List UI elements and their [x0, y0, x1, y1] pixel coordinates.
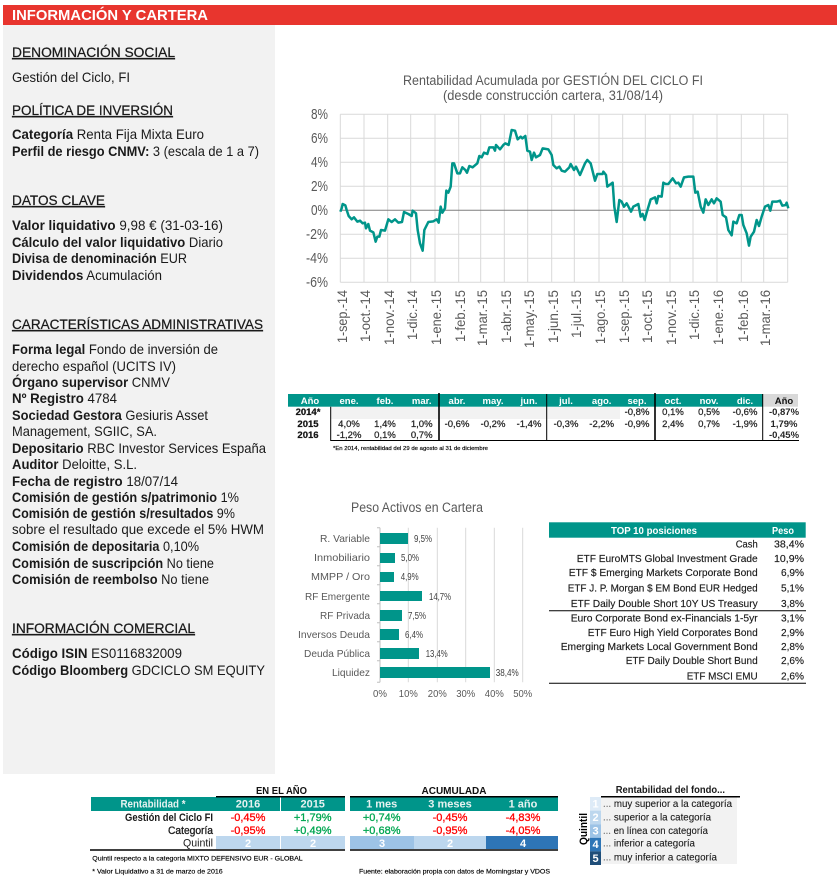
row 2015: 1,0%	[411, 419, 433, 430]
text: commercial information: Código Bloomberg GDCICLO SM EQUITY	[12, 662, 266, 678]
line chart: rentabilidad acumulada	[306, 73, 788, 348]
table header: sep.	[627, 396, 647, 407]
teal header row: 2016	[236, 798, 260, 810]
text: administrative characteristics: sobre el resultado que excede el 5% HWM	[12, 521, 264, 537]
text: key data: Valor liquidativo 9,98 € (31-03-16)	[12, 217, 223, 233]
table header: abr.	[449, 396, 465, 407]
top 10 rows: 6,9%	[781, 567, 804, 579]
text: investment policy	[12, 126, 259, 159]
section headings	[256, 784, 486, 797]
zero axis	[340, 209, 788, 211]
header bar	[3, 5, 837, 25]
top 10 rows: 5,1%	[781, 583, 804, 595]
x axis labels	[334, 290, 773, 348]
heading: datos clave: DATOS CLAVE	[12, 192, 105, 208]
row quintil	[183, 836, 558, 850]
teal header row: 2015	[300, 798, 325, 810]
x axis labels: 1-jun.-15	[545, 290, 561, 343]
chart title: Rentabilidad Acumulada por GESTIÓN DEL CICLO FI	[403, 73, 703, 88]
row 2015	[297, 419, 798, 430]
table header: Año	[775, 396, 793, 407]
table header: nov.	[700, 396, 718, 407]
row quintil: 2	[447, 838, 453, 850]
top 10 rows: ETF Daily Double Short Bund	[626, 655, 758, 667]
teal header row: 1 mes	[366, 798, 397, 810]
text: administrative characteristics: Sociedad Gestora Gesiuris Asset	[12, 407, 208, 423]
category labels: R. Variable	[320, 533, 370, 545]
row gestión del ciclo: +0,74%	[363, 812, 401, 824]
row 2015: 2015	[297, 419, 319, 430]
row 2014: 0,5%	[698, 407, 720, 418]
x axis labels: 1-dic.-15	[686, 290, 702, 340]
text: commercial information	[12, 645, 266, 678]
legend swatches: 4	[592, 839, 599, 851]
chart title: (desde construcción cartera, 31/08/14)	[443, 88, 663, 103]
row quintil: 4	[520, 838, 527, 850]
row 2016: 2016	[297, 430, 319, 441]
heading: características administrativas: CARACTERÍSTICAS ADMINISTRATIVAS	[12, 316, 263, 332]
x axis labels: 1-sep.-15	[616, 290, 632, 343]
heading: denominación social: DENOMINACIÓN SOCIAL	[12, 44, 175, 60]
value labels: 14,7%	[429, 592, 451, 603]
row 2016: -1,2%	[337, 430, 362, 441]
top 10 header: Peso	[772, 525, 794, 537]
legend items: ... muy superior a la categoría	[603, 799, 732, 810]
top 10 rows: ETF MSCI EMU	[687, 671, 758, 683]
top 10 header	[549, 522, 806, 538]
row categoría: -4,05%	[506, 825, 541, 837]
text: administrative characteristics: Management, SGIIC, SA.	[12, 423, 157, 439]
footnotes: Quintil respecto a la categoria MIXTO DEFENSIVO EUR - GLOBAL	[92, 855, 303, 862]
table header: dic.	[737, 396, 753, 407]
text: investment policy: Categoría Renta Fija Mixta Euro	[12, 126, 204, 142]
row 2016	[297, 430, 800, 441]
text: fund name: Gestión del Ciclo, FI	[12, 69, 130, 85]
table header: jun.	[520, 396, 537, 407]
x axis labels: 1-oct.-14	[357, 290, 373, 342]
x axis labels: 1-sep.-14	[334, 290, 350, 343]
x axis labels: 1-may.-15	[521, 290, 537, 348]
row categoría: -0,95%	[231, 825, 266, 837]
row gestión del ciclo: +1,79%	[294, 812, 332, 824]
footnotes: * Valor Liquidativo a 31 de marzo de 2016	[92, 869, 223, 876]
x axis labels: 1-ene.-16	[710, 290, 726, 345]
text: investment policy: Perfil de riesgo CNMV: 3 (escala de 1 a 7)	[12, 143, 259, 159]
teal header row: 1 año	[509, 798, 538, 810]
value labels: 13,4%	[426, 649, 448, 660]
row 2015: 2,4%	[662, 419, 684, 430]
y axis labels: 0%	[311, 202, 328, 219]
row categoría: +0,68%	[363, 825, 401, 837]
section headings: EN EL AÑO	[256, 784, 307, 797]
top 10 rows: 2,6%	[781, 655, 804, 667]
text: administrative characteristics	[12, 341, 266, 587]
y axis labels: 6%	[311, 130, 328, 147]
legend swatches: 1	[592, 798, 599, 810]
text: administrative characteristics: Fecha de registro 18/07/14	[12, 473, 178, 489]
panel: left information column	[3, 25, 275, 774]
text: key data: Cálculo del valor liquidativo Diario	[12, 234, 223, 250]
legend items	[603, 799, 732, 864]
x axis labels: 1-mar.-15	[474, 290, 490, 346]
row 2014	[296, 407, 800, 418]
category labels: MMPP / Oro	[311, 571, 370, 583]
row categoría: -0,95%	[433, 825, 468, 837]
row categoría: Categoría	[168, 825, 214, 837]
top 10 rows: 2,8%	[781, 641, 804, 653]
row 2015: -2,2%	[589, 419, 615, 430]
text: commercial information: Código ISIN ES0116832009	[12, 645, 182, 661]
table header: feb.	[377, 396, 393, 407]
row 2014: -0,87%	[769, 407, 800, 418]
top 10 rows: ETF $ Emerging Markets Corporate Bond	[569, 567, 758, 579]
top 10 rows: Cash	[736, 539, 758, 551]
legend items: ... inferior a categoría	[603, 839, 695, 850]
text: key data	[12, 217, 223, 283]
row quintil: 2	[245, 838, 251, 850]
top 10 rows: 10,9%	[774, 553, 804, 565]
table header: jul.	[558, 396, 573, 407]
text: key data: Divisa de denominación EUR	[12, 250, 187, 266]
x axis labels: 1-mar.-16	[757, 290, 773, 346]
value labels: 7,5%	[408, 611, 426, 622]
row gestión del ciclo	[125, 812, 541, 824]
row gestión del ciclo: Gestión del Ciclo FI	[125, 812, 213, 824]
x axis labels: 1-dic.-14	[404, 290, 420, 340]
value labels: 5,0%	[401, 553, 419, 564]
y axis labels: 4%	[311, 154, 328, 171]
table header: Año	[301, 396, 319, 407]
x axis labels: 1-nov.-14	[381, 290, 397, 345]
top 10 rows: ETF Daily Double Short 10Y US Treasury	[571, 598, 758, 610]
x axis percentages	[373, 688, 532, 700]
footnotes: Fuente: elaboración propia con datos de Morningstar y VDOS	[359, 869, 551, 876]
x axis labels: 1-feb.-15	[452, 290, 468, 342]
text: administrative characteristics: Comisión de suscripción No tiene	[12, 555, 214, 571]
heading: política de inversión: POLÍTICA DE INVERSIÓN	[12, 102, 173, 118]
y axis labels	[306, 106, 328, 291]
heading: información comercial: INFORMACIÓN COMERCIAL	[12, 620, 195, 636]
x axis percentages: 20%	[428, 688, 447, 700]
y axis labels: -4%	[306, 250, 328, 267]
y axis labels: -2%	[306, 226, 328, 243]
top 10 rows: 3,1%	[781, 613, 804, 625]
row gestión del ciclo: -4,83%	[506, 812, 541, 824]
top 10 rows: ETF Euro High Yield Corporates Bond	[588, 627, 758, 639]
y axis labels: 2%	[311, 178, 328, 195]
row 2015: -1,9%	[733, 419, 758, 430]
teal header row	[91, 797, 558, 811]
left column text	[12, 44, 266, 678]
table header: ago.	[592, 396, 611, 407]
row 2015: 1,4%	[374, 419, 396, 430]
top 10 rows: ETF EuroMTS Global Investment Grade	[577, 553, 758, 565]
category labels: Liquidez	[332, 667, 370, 679]
text: administrative characteristics: Forma legal Fondo de inversión de	[12, 341, 218, 357]
quintile legend	[578, 785, 740, 865]
category labels: Deuda Pública	[304, 648, 370, 660]
x axis percentages: 40%	[485, 688, 504, 700]
text: administrative characteristics: Comisión de gestión s/patrimonio 1%	[12, 489, 239, 505]
x axis labels: 1-nov.-15	[663, 290, 679, 345]
category labels	[298, 533, 370, 679]
value labels: 6,4%	[405, 630, 423, 641]
bar chart title: Peso Activos en Cartera	[351, 500, 483, 515]
row quintil: Quintil	[183, 838, 213, 850]
row 2016: 0,1%	[374, 430, 396, 441]
text: administrative characteristics: Comisión de depositaria 0,10%	[12, 538, 199, 554]
row gestión del ciclo: -0,45%	[231, 812, 266, 824]
row gestión del ciclo: -0,45%	[433, 812, 468, 824]
legend swatches: 2	[592, 812, 599, 824]
teal header row: 3 meses	[428, 798, 472, 810]
legend items: ... superior a la categoría	[603, 813, 711, 824]
table footnote: *En 2014, rentabilidad del 29 de agosto al 31 de diciembre	[333, 446, 488, 452]
header bar: INFORMACIÓN Y CARTERA	[12, 6, 208, 24]
row 2015: -0,2%	[481, 419, 506, 430]
row categoría: +0,49%	[294, 825, 332, 837]
table header: may.	[483, 396, 503, 407]
x axis labels: 1-jul.-15	[568, 290, 584, 338]
bars	[380, 533, 490, 678]
x axis labels: 1-ago.-15	[592, 290, 608, 344]
text: administrative characteristics: Nº Registro 4784	[12, 390, 117, 406]
summary returns table	[90, 784, 558, 850]
table header: oct.	[665, 396, 681, 407]
row quintil: 3	[379, 838, 385, 850]
text: key data: Dividendos Acumulación	[12, 267, 162, 283]
text: administrative characteristics: derecho español (UCITS IV)	[12, 358, 176, 374]
category labels: RF Privada	[320, 610, 370, 622]
value labels	[401, 534, 519, 679]
row 2014: -0,6%	[733, 407, 758, 418]
x axis labels: 1-feb.-16	[735, 290, 751, 342]
value labels: 38,4%	[496, 668, 519, 679]
top 10 rows: 2,6%	[781, 671, 804, 683]
legend title: Rentabilidad del fondo...	[616, 785, 725, 796]
top 10 rows: 38,4%	[774, 539, 804, 551]
y axis labels: 8%	[311, 106, 328, 123]
top 10 rows: 2,9%	[781, 627, 804, 639]
data line	[340, 130, 788, 251]
top 10 rows: Euro Corporate Bond ex-Financials 1-5yr	[571, 613, 758, 625]
legend items: ... muy inferior a categoría	[603, 853, 717, 864]
legend rotated label: Quintil	[578, 813, 590, 845]
row 2014: -0,8%	[625, 407, 650, 418]
x axis percentages: 30%	[456, 688, 475, 700]
row 2015: 0,7%	[698, 419, 720, 430]
table header	[301, 396, 793, 407]
legend swatches: 5	[592, 853, 599, 865]
text: administrative characteristics: Órgano supervisor CNMV	[12, 373, 171, 390]
category labels: RF Emergente	[305, 591, 370, 603]
x axis percentages: 10%	[399, 688, 418, 700]
text: administrative characteristics: Depositario RBC Investor Services España	[12, 440, 266, 456]
top 10 rows: 3,8%	[781, 598, 804, 610]
table header: ene.	[339, 396, 359, 407]
row 2015: 4,0%	[338, 419, 360, 430]
top 10 rows: Emerging Markets Local Government Bond	[561, 641, 758, 653]
row 2016: -0,45%	[769, 430, 800, 441]
x axis labels: 1-ene.-15	[428, 290, 444, 345]
x axis percentages: 0%	[373, 688, 387, 700]
text: administrative characteristics: Comisión de reembolso No tiene	[12, 571, 209, 587]
table header: mar.	[412, 396, 431, 407]
value labels: 9,5%	[414, 534, 432, 545]
legend swatches: 3	[592, 826, 599, 838]
section headings: ACUMULADA	[422, 786, 486, 797]
row 2014: 2014*	[296, 407, 321, 418]
y axis labels: -6%	[306, 274, 328, 291]
legend swatches	[590, 797, 601, 865]
row 2014: 0,1%	[662, 407, 684, 418]
row 2016: 0,7%	[411, 430, 433, 441]
chart title	[403, 73, 703, 103]
value labels: 4,9%	[401, 572, 419, 583]
footnotes	[92, 855, 551, 876]
top 10 rows: ETF J. P. Morgan $ EM Bond EUR Hedged	[568, 583, 758, 595]
bar chart: peso activos en cartera	[298, 500, 532, 700]
x axis labels: 1-oct.-15	[639, 290, 655, 343]
teal header row: Rentabilidad *	[120, 798, 186, 810]
x axis labels: 1-abr.-15	[498, 290, 514, 343]
text: administrative characteristics: Auditor Deloitte, S.L.	[12, 456, 137, 472]
text: administrative characteristics: Comisión de gestión s/resultados 9%	[12, 505, 235, 521]
category labels: Inversos Deuda	[298, 629, 370, 641]
row 2015: -0,3%	[554, 419, 579, 430]
row quintil: 2	[310, 838, 316, 850]
category labels: Inmobiliario	[314, 552, 370, 564]
row 2015: -0,6%	[445, 419, 470, 430]
row categoría	[168, 825, 541, 837]
legend items: ... en línea con categoría	[603, 826, 708, 837]
row 2015: 1,79%	[771, 419, 798, 430]
x axis percentages: 50%	[513, 688, 532, 700]
row 2015: -1,4%	[517, 419, 542, 430]
monthly returns table	[288, 393, 800, 441]
row 2015: -0,9%	[625, 419, 650, 430]
top 10 positions table	[549, 522, 806, 683]
top 10 rows	[561, 539, 804, 683]
top 10 header: TOP 10 posiciones	[611, 525, 697, 537]
